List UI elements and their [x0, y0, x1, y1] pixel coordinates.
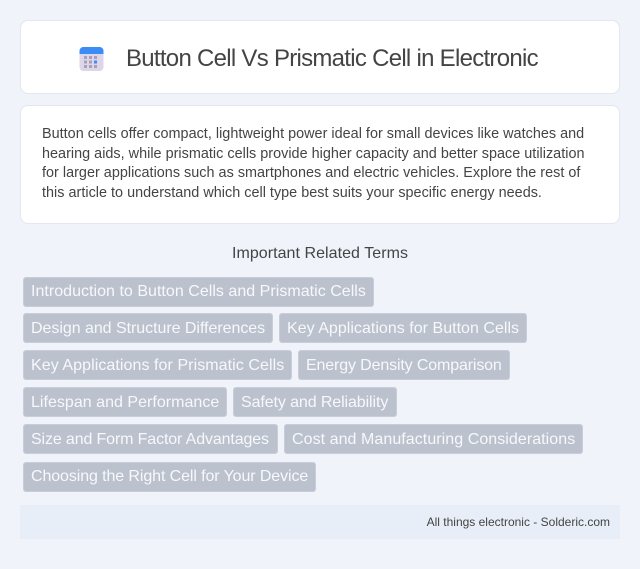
tag: Energy Density Comparison: [306, 357, 502, 374]
tag: Size and Form Factor Advantages: [31, 431, 269, 448]
tag: [298, 350, 510, 380]
tag: Safety and Reliability: [241, 394, 388, 411]
panel: summary text: [20, 105, 620, 224]
tag: Cost and Manufacturing Considerations: [292, 431, 575, 448]
summary paragraph: hearing aids, while prismatic cells provide higher capacity and better space utilization: [42, 146, 584, 162]
tag: Key Applications for Button Cells: [287, 320, 519, 337]
tag: [23, 350, 292, 380]
summary paragraph: this article to understand which cell type best suits your specific energy needs.: [42, 185, 542, 201]
tag: [233, 387, 397, 417]
tag: [284, 424, 583, 454]
summary paragraph: [42, 126, 584, 201]
tag: [23, 277, 374, 307]
icon: calendar: [80, 47, 104, 71]
summary paragraph: Button cells offer compact, lightweight power ideal for small devices like watches and: [42, 126, 584, 142]
footer bar: [20, 505, 620, 539]
tag: Choosing the Right Cell for Your Device: [31, 468, 308, 485]
summary paragraph: for larger applications such as smartphones and electric vehicles. Explore the rest of: [42, 165, 580, 181]
footer text: All things electronic - Solderic.com: [427, 515, 610, 529]
tag: Design and Structure Differences: [31, 320, 265, 337]
tag: Introduction to Button Cells and Prismatic Cells: [31, 283, 366, 300]
tag: [23, 387, 227, 417]
title: Button Cell Vs Prismatic Cell in Electronic: [126, 45, 538, 72]
panel: header: [20, 20, 620, 94]
panel: tags: [23, 277, 583, 492]
tag: [23, 313, 273, 343]
tag: Key Applications for Prismatic Cells: [31, 357, 284, 374]
tag: Lifespan and Performance: [31, 394, 219, 411]
tag: [279, 313, 527, 343]
tag: [23, 424, 278, 454]
heading: related terms: Important Related Terms: [232, 245, 408, 262]
tag: [23, 462, 316, 492]
